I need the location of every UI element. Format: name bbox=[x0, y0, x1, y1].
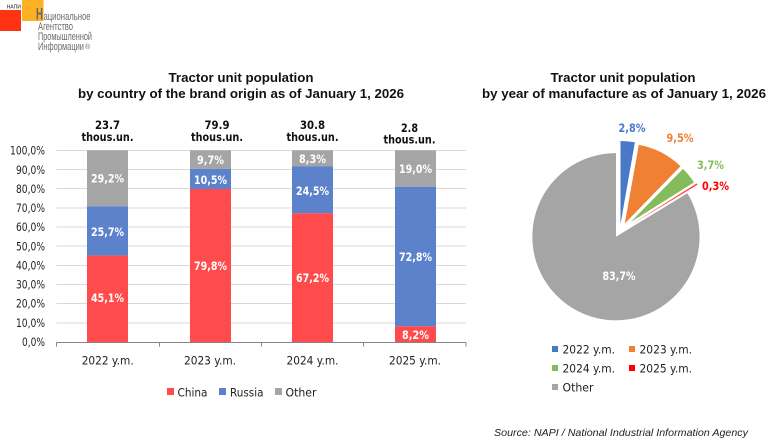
slice: 2024 bbox=[627, 168, 695, 225]
bar: 2025: 72,8% bbox=[399, 250, 432, 264]
legend: pie chart bbox=[552, 342, 692, 394]
logo: NAPI: Н bbox=[36, 4, 43, 24]
source note: Source: NAPI / National Industrial Information Agency bbox=[494, 427, 749, 439]
bar: 2024: 24,5% bbox=[296, 184, 329, 198]
totals above bars: thous.un. bbox=[384, 132, 436, 146]
title: pie chart bbox=[482, 71, 766, 101]
title: bar chart: Tractor unit population bbox=[168, 71, 314, 85]
bar: 2022: 29,2% bbox=[91, 172, 124, 186]
pie value labels: 9,5% bbox=[666, 131, 694, 145]
x axis labels: 2023 y.m. bbox=[184, 354, 236, 368]
stacked bar chart bbox=[10, 118, 466, 400]
title: bar chart: by country of the brand origin as of January 1, 2026 bbox=[78, 87, 404, 101]
logo: NAPI: НАПИ bbox=[6, 4, 21, 10]
title: pie chart: Tractor unit population bbox=[550, 71, 696, 85]
legend: pie chart: Other bbox=[562, 380, 594, 394]
legend: pie chart: 2024 y.m. bbox=[562, 362, 615, 376]
y axis labels: 70,0% bbox=[16, 201, 45, 215]
y axis labels: 80,0% bbox=[16, 182, 45, 196]
legend: bar chart: Russia bbox=[230, 386, 264, 400]
y axis labels: 50,0% bbox=[16, 240, 45, 254]
bar: 2023: 9,7% bbox=[197, 153, 224, 167]
y axis labels: 100,0% bbox=[10, 144, 45, 158]
bar: 2024 bbox=[292, 150, 333, 342]
bar: 2022 bbox=[87, 150, 128, 342]
legend: bar chart: Other bbox=[286, 386, 317, 400]
slice: other bbox=[532, 153, 700, 320]
pie chart bbox=[532, 121, 729, 394]
totals above bars bbox=[82, 118, 436, 146]
x axis labels bbox=[82, 354, 441, 368]
bar: 2025: 8,2% bbox=[402, 328, 429, 342]
slice: 2023 bbox=[624, 144, 681, 225]
logo: NAPI: Промышленной bbox=[38, 31, 92, 43]
legend: bar chart: China bbox=[178, 386, 208, 400]
x axis labels: 2022 y.m. bbox=[82, 354, 134, 368]
y axis labels: 30,0% bbox=[16, 278, 45, 292]
bar: 2022: 25,7% bbox=[91, 225, 124, 239]
x axis labels: 2024 y.m. bbox=[286, 354, 338, 368]
pie value labels bbox=[602, 121, 729, 283]
bar: 2023 bbox=[190, 150, 231, 342]
legend: pie chart: 2022 y.m. bbox=[562, 342, 615, 356]
totals above bars: 30.8 bbox=[300, 118, 325, 132]
bar: 2025 bbox=[395, 150, 436, 342]
totals above bars: thous.un. bbox=[82, 130, 134, 144]
legend: pie chart: 2025 y.m. bbox=[640, 362, 692, 376]
totals above bars: thous.un. bbox=[286, 130, 338, 144]
x axis labels: 2025 y.m. bbox=[389, 354, 441, 368]
logo: NAPI bbox=[0, 0, 92, 53]
bar: 2023: 79,8% bbox=[194, 259, 227, 273]
logo: NAPI: Агентство bbox=[38, 21, 73, 33]
y axis labels: 0,0% bbox=[22, 335, 45, 349]
logo: NAPI: ® bbox=[85, 43, 91, 51]
y axis labels: 60,0% bbox=[16, 220, 45, 234]
logo: NAPI: ациональное bbox=[44, 11, 90, 23]
logo: NAPI: Информации bbox=[38, 41, 84, 53]
bar: 2024: 8,3% bbox=[299, 152, 326, 166]
bar: 2023: 10,5% bbox=[194, 173, 227, 187]
totals above bars: 79.9 bbox=[204, 118, 230, 132]
title: pie chart: by year of manufacture as of January 1, 2026 bbox=[482, 87, 766, 101]
legend: pie chart: 2023 y.m. bbox=[640, 342, 692, 356]
pie value labels: 0,3% bbox=[702, 179, 729, 193]
y axis labels: 40,0% bbox=[16, 258, 45, 272]
pie value labels: 83,7% bbox=[602, 269, 636, 283]
bar: 2025: 19,0% bbox=[399, 162, 432, 176]
bar: 2022: 45,1% bbox=[91, 291, 124, 305]
pie value labels: 3,7% bbox=[697, 158, 724, 172]
y axis labels: 90,0% bbox=[16, 163, 45, 177]
bar: 2024: 67,2% bbox=[296, 271, 329, 285]
slice: 2022 bbox=[620, 141, 635, 224]
totals above bars: thous.un. bbox=[191, 130, 243, 144]
pie value labels: 2,8% bbox=[618, 121, 646, 135]
title: bar chart bbox=[78, 71, 404, 101]
legend: bar chart bbox=[167, 386, 317, 400]
y axis labels bbox=[10, 144, 45, 349]
y axis labels: 20,0% bbox=[16, 296, 45, 310]
slice: 2025 bbox=[629, 183, 698, 226]
y axis labels: 10,0% bbox=[16, 316, 45, 330]
totals above bars: 23.7 bbox=[95, 118, 120, 132]
totals above bars: 2.8 bbox=[401, 121, 418, 135]
